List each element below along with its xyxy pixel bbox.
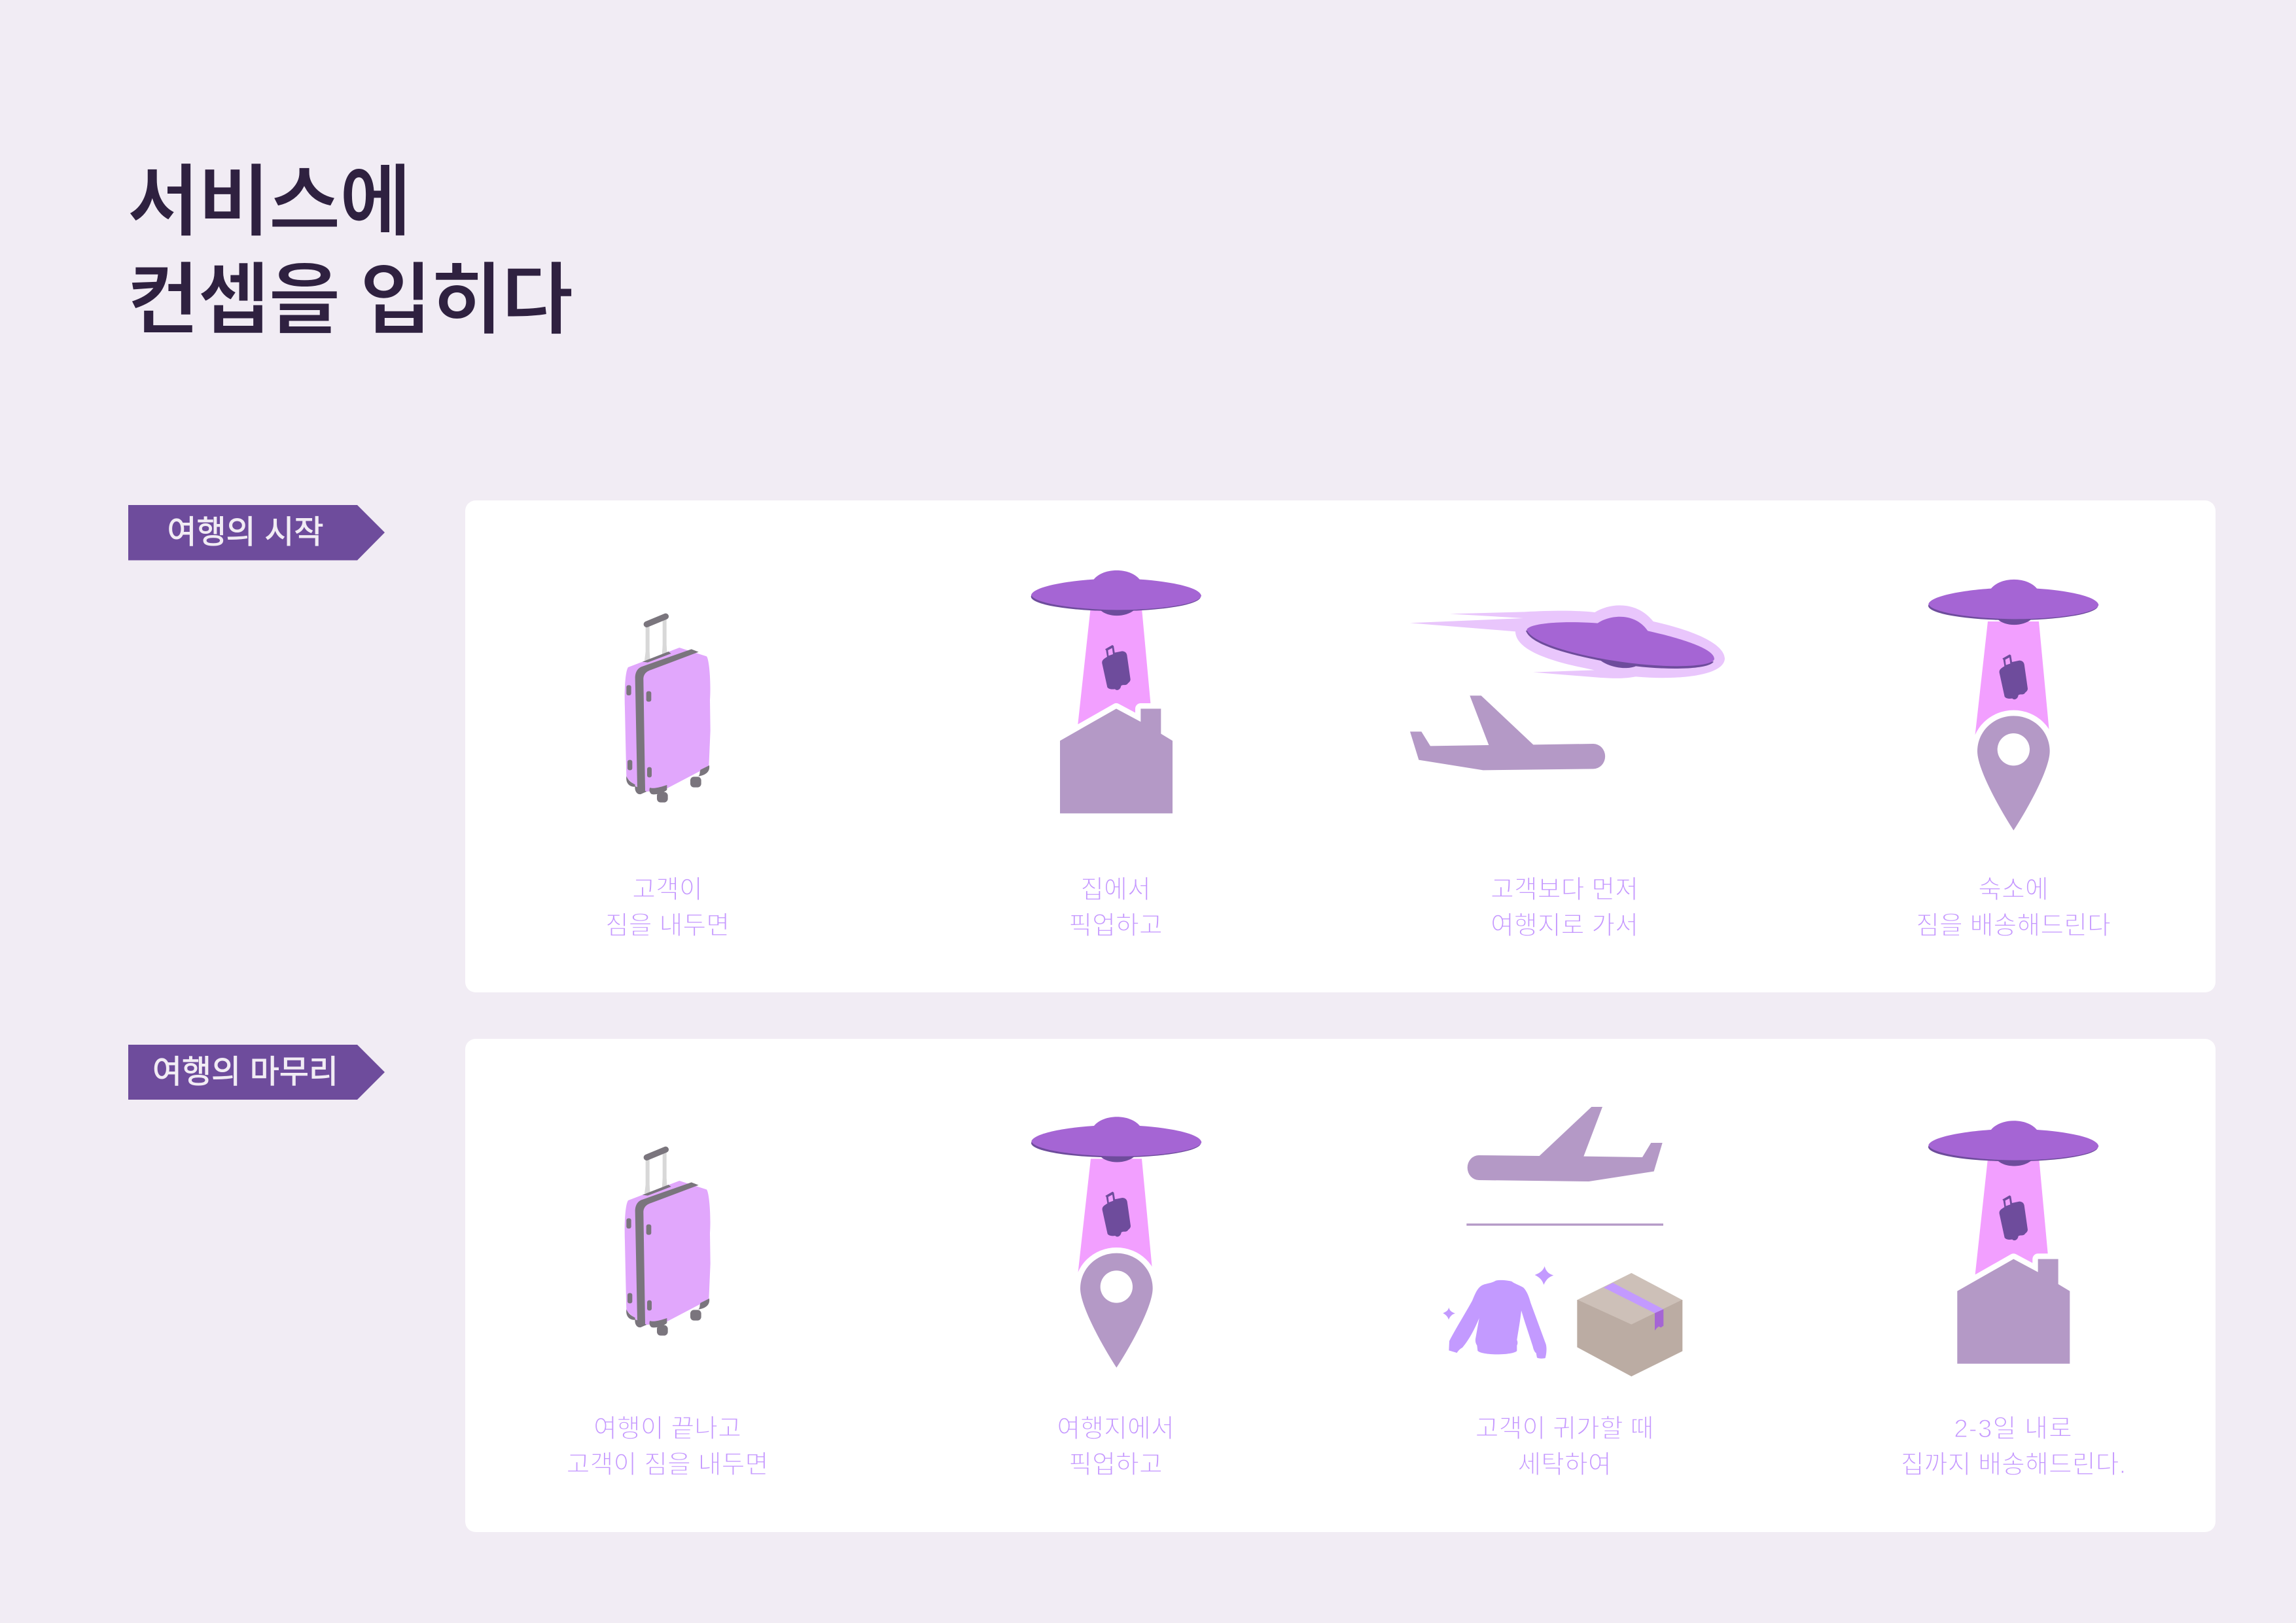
title: 서비스에	[127, 158, 410, 246]
label: end of trip	[128, 1045, 385, 1100]
caption: column 1, row 1: 짐을 내두면	[605, 912, 730, 940]
caption: column 3, row 2: 고객이 귀가할 때	[1475, 1415, 1653, 1443]
icon: parcel box	[1578, 1274, 1682, 1376]
icon: suitcase, row 2	[625, 1149, 711, 1336]
icon: suitcase, row 1	[625, 616, 711, 803]
caption: column 1, row 2: 고객이 짐을 내두면	[567, 1451, 768, 1479]
label: start of trip: 여행의 시작	[167, 515, 324, 550]
caption: column 3, row 1: 고객보다 먼저	[1491, 876, 1638, 904]
icon: flying UFO with plane, row 1	[1410, 605, 1725, 770]
caption: column 1, row 2: 여행이 끝나고	[593, 1415, 741, 1443]
icon: sweater with sparkles	[1443, 1266, 1553, 1359]
title	[127, 158, 572, 344]
icon: UFO beaming suitcase from house, row 1	[1031, 570, 1201, 813]
icon: UFO beaming suitcase to house, row 2	[1928, 1121, 2098, 1364]
caption: column 2, row 2: 여행지에서	[1057, 1415, 1174, 1443]
icon: UFO beaming suitcase to location pin, row 1	[1928, 580, 2098, 830]
caption: column 2, row 1: 집에서	[1080, 876, 1151, 904]
caption: column 3, row 1: 여행지로 가서	[1491, 912, 1638, 940]
caption: column 4, row 1: 숙소에	[1978, 876, 2049, 904]
caption: column 1, row 2	[567, 1415, 768, 1479]
title: 컨셉을 입히다	[127, 256, 572, 344]
icon: UFO beaming suitcase from location pin, row 2	[1031, 1117, 1201, 1368]
caption: column 1, row 1: 고객이	[632, 876, 703, 904]
caption: column 2, row 1	[1069, 876, 1163, 940]
caption: column 3, row 2	[1475, 1415, 1653, 1479]
caption: column 4, row 2: 2-3일 내로	[1954, 1415, 2073, 1443]
caption: column 4, row 2	[1901, 1415, 2126, 1479]
panel: start of trip	[465, 500, 2216, 992]
caption: column 2, row 2: 픽업하고	[1069, 1451, 1163, 1479]
caption: column 1, row 1	[605, 876, 730, 940]
caption: column 4, row 1: 짐을 배송해드린다	[1916, 912, 2111, 940]
caption: column 3, row 2: 세탁하여	[1517, 1451, 1612, 1479]
caption: column 4, row 1	[1916, 876, 2111, 940]
panel: end of trip	[465, 1039, 2216, 1532]
caption: column 2, row 2	[1057, 1415, 1174, 1479]
caption: column 2, row 1: 픽업하고	[1069, 912, 1163, 940]
icon: plane, divider, sweater and parcel, row 2	[1443, 1107, 1682, 1376]
label: start of trip	[128, 505, 385, 560]
caption: column 4, row 2: 집까지 배송해드린다.	[1901, 1451, 2126, 1479]
label: end of trip: 여행의 마무리	[152, 1055, 338, 1090]
caption: column 3, row 1	[1491, 876, 1638, 940]
icon: plane	[1468, 1107, 1663, 1181]
